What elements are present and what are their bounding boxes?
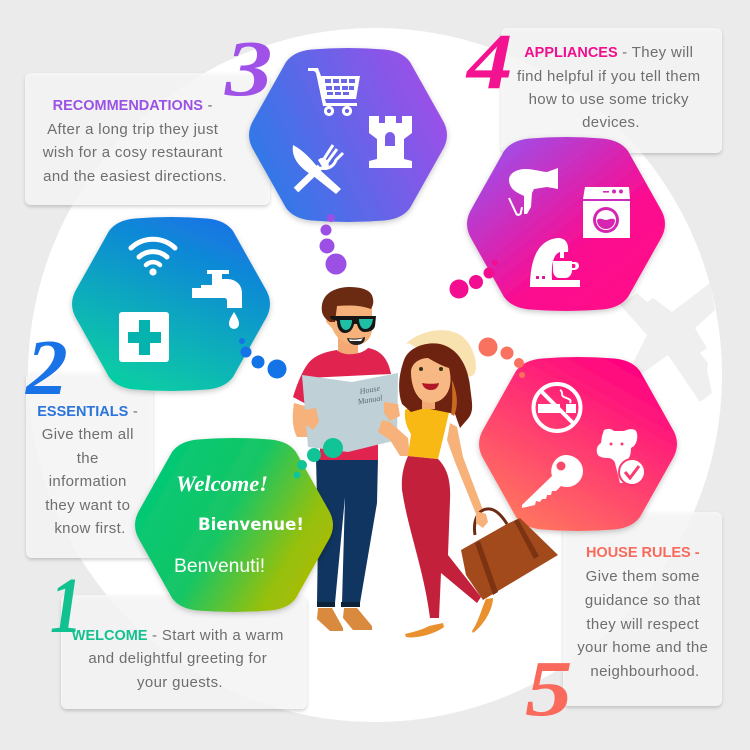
hexagon 4: appliances [467,137,665,311]
appliances text: devices. [582,114,640,131]
icon: key [522,455,583,508]
hexagon 2: essentials [72,217,270,391]
appliances text: APPLIANCES - They will [524,44,693,61]
woman [378,330,493,637]
icon: knife and fork [293,145,343,194]
greeting: Bienvenue: Bienvenue! [198,515,304,534]
appliances text: find helpful if you tell them [517,68,701,85]
hexagon 5: house rules [479,357,677,531]
icon: faucet with drop [192,270,242,329]
house manual map [302,373,398,452]
icon: shopping cart [308,68,360,115]
number 3: 3 [224,24,272,112]
appliances text: how to use some tricky [529,91,689,108]
number 4: 4 [465,17,513,106]
house rules text: guidance so that [585,592,701,609]
welcome text: your guests. [137,674,223,691]
icon: washing machine [583,187,630,238]
number 1: 1 [50,561,82,650]
house rules text: Give them some [586,568,700,585]
recommendations text: RECOMMENDATIONS - [53,97,213,114]
panel: appliances card [501,28,722,153]
recommendations text: and the easiest directions. [43,168,227,185]
number 2: 2 [25,323,68,412]
essentials text: ESSENTIALS - [37,403,138,420]
dots: hexagon 1 connector [294,438,343,478]
greeting: Welcome: Welcome! [176,471,268,496]
essentials text: know first. [54,520,126,537]
panel: essentials card [26,372,153,558]
essentials text: the [77,450,99,467]
welcome text: and delightful greeting for [88,650,267,667]
panel: house rules card [563,512,722,706]
dots: hexagon 2 connector [239,338,286,378]
welcome text: WELCOME - Start with a warm [72,627,284,644]
greeting: Benvenuti: Benvenuti! [174,556,265,577]
icon: no smoking [534,384,580,431]
hexagon 1: welcome [135,438,333,612]
hands on map [304,402,400,430]
man [293,287,391,631]
dots: hexagon 5 connector [478,338,525,378]
couple illustration [293,287,558,637]
house manual map: House [358,384,381,396]
house rules text: your home and the [577,639,708,656]
icon: dog with check [597,429,645,485]
bag [461,509,558,600]
essentials text: information [49,473,127,490]
house rules text: they will respect [586,616,700,633]
recommendations text: After a long trip they just [47,121,219,138]
icon: coffee machine [530,238,580,287]
icon: wifi [131,239,175,275]
dots: hexagon 4 connector [450,260,498,298]
icon: castle tower [369,116,412,168]
recommendations text: wish for a cosy restaurant [42,144,223,161]
number 5: 5 [525,644,572,732]
airplane watermark [620,283,715,402]
house manual map: Manual [356,393,384,407]
house rules text: HOUSE RULES - [586,545,700,561]
hexagon 3: recommendations [249,48,447,222]
essentials text: they want to [45,497,130,514]
icon: hair dryer [509,168,558,215]
panel: recommendations card [25,73,270,205]
house rules text: neighbourhood. [590,663,700,680]
dots: hexagon 3 connector [320,214,346,274]
panel: welcome card [61,595,307,709]
essentials text: Give them all [42,426,134,443]
icon: first aid box [119,312,169,362]
